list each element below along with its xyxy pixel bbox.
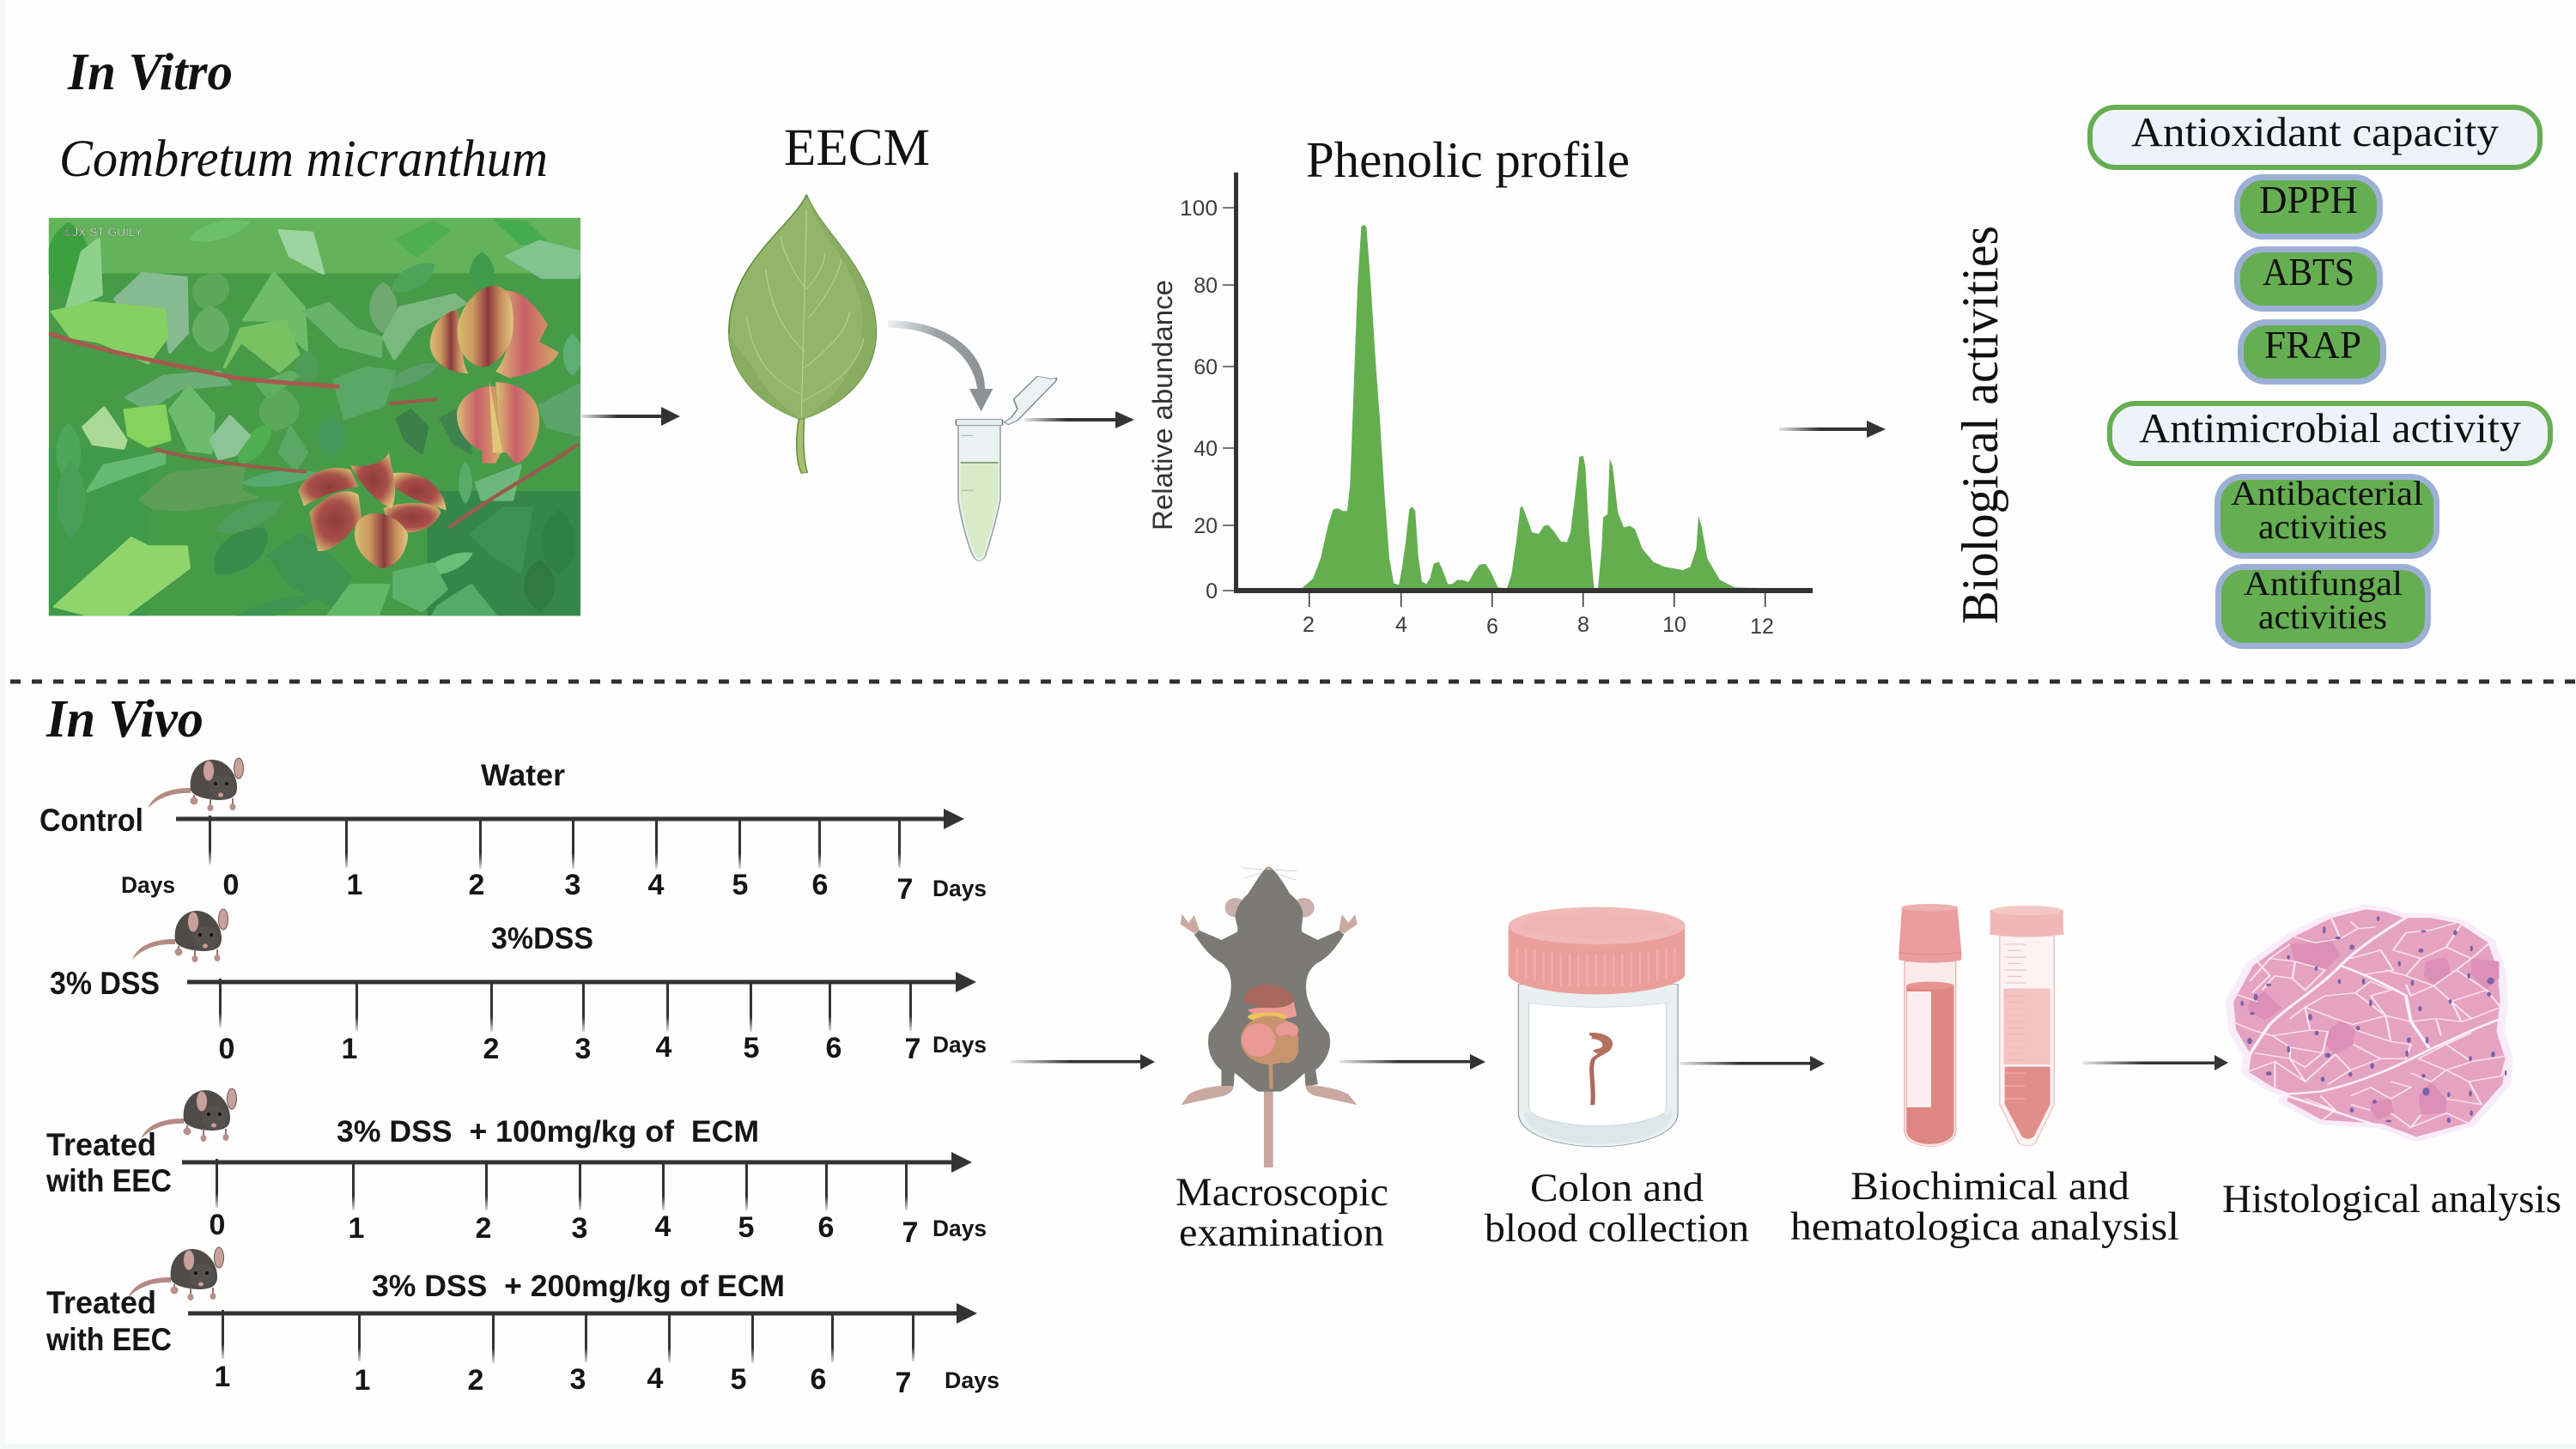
chart: phenolic profile area chart: [1147, 173, 1813, 639]
arrow: plant to leaf: [580, 407, 680, 426]
box: Antibacterial activities: [2217, 474, 2437, 556]
box: FRAP: FRAP: [2264, 323, 2361, 367]
day labels: 2: [468, 1364, 483, 1397]
label: Treated with EEC: Treated: [46, 1127, 156, 1162]
centrifuge tube: [1990, 906, 2064, 1146]
caption: Macroscopic examination: Macroscopic: [1176, 1170, 1388, 1215]
box: DPPH: DPPH: [2259, 178, 2358, 221]
box: DPPH: [2238, 177, 2380, 237]
label: Biological activities: Biological activities: [1952, 226, 2008, 624]
arrow: chart to activities: [1779, 421, 1886, 438]
caption: Biochimical and hematologica analysisl: [1790, 1164, 2179, 1249]
y tick labels: 20: [1194, 514, 1218, 538]
label: Treated with EEC second: with EEC: [46, 1322, 172, 1357]
day labels: 7: [902, 1216, 918, 1249]
y tick labels: 80: [1194, 274, 1218, 298]
heading: Combretum micranthum: Combretum micranthum: [59, 130, 548, 188]
x tick labels: [1303, 613, 1774, 639]
day labels: 2: [469, 869, 484, 901]
label: Treated with EEC second: [46, 1285, 172, 1357]
photo: Combretum micranthum plant: [47, 214, 581, 628]
y tick labels: 60: [1194, 355, 1218, 379]
label: 200 mg/kg dose: 3% DSS + 200mg/kg of ECM: [372, 1270, 785, 1303]
day labels: 6: [812, 869, 828, 901]
arrow: tubes to histology: [2083, 1055, 2228, 1070]
day labels: 1: [347, 869, 362, 901]
x tick labels: 6: [1486, 615, 1498, 639]
timeline: control group: [39, 758, 987, 906]
day labels: 1: [342, 1033, 357, 1065]
day labels: [215, 1361, 999, 1399]
heading: In Vitro: In Vitro: [67, 44, 233, 101]
day labels: 4: [647, 1362, 664, 1395]
label: 100 mg/kg dose: 3% DSS + 100mg/kg of ECM: [337, 1115, 759, 1149]
day labels: 5: [744, 1032, 759, 1064]
day labels: 0: [223, 869, 239, 901]
watermark text: ©JX ST GUILY: [64, 225, 143, 239]
day labels: [121, 869, 987, 906]
arrow: dissection to jar: [1340, 1054, 1485, 1070]
day labels: 6: [811, 1363, 826, 1396]
y tick labels: 40: [1194, 437, 1218, 461]
caption: Biochimical and hematologica analysisl: Biochimical and: [1850, 1164, 2129, 1209]
box: Antifungal activities: Antifungal: [2244, 564, 2403, 603]
heading: In Vivo: In Vivo: [46, 690, 204, 749]
timeline arrow: [176, 809, 964, 869]
day labels: 0: [219, 1033, 234, 1065]
caption: Histological analysis: Histological analysis: [2222, 1177, 2561, 1222]
box: Antioxidant capacity: [2090, 107, 2540, 167]
x tick labels: 4: [1395, 613, 1407, 637]
icon: mouse treated 100: [141, 1088, 237, 1142]
box: ABTS: [2238, 249, 2380, 309]
illustration: blood tubes: [1899, 904, 2064, 1146]
day labels: 4: [648, 869, 665, 901]
day labels: 7: [897, 873, 913, 906]
timeline: treated 200 mg/kg: [46, 1247, 999, 1399]
arrow: timelines to dissection: [1011, 1054, 1155, 1070]
day labels: 1: [215, 1361, 230, 1393]
timeline: 3% DSS group: [50, 909, 987, 1065]
icon: leaf: [729, 195, 876, 473]
arrow: tube to chart: [1024, 411, 1134, 428]
day labels: [210, 1209, 987, 1249]
day labels: 2: [483, 1033, 499, 1065]
label: Control: Control: [39, 803, 143, 838]
x tick labels: 12: [1750, 615, 1774, 639]
heading: EECM: EECM: [784, 119, 930, 177]
box: Antifungal activities: [2219, 564, 2428, 646]
panel: in vivo: [39, 690, 2561, 1399]
timeline arrow: [187, 972, 976, 1032]
day labels: 3: [565, 869, 580, 901]
day labels: 5: [738, 1211, 754, 1244]
day labels: 4: [655, 1210, 671, 1243]
timeline: treated 100 mg/kg: [46, 1088, 987, 1249]
day labels: [219, 1031, 987, 1065]
day labels: 1: [349, 1212, 364, 1245]
x tick labels: 10: [1662, 613, 1686, 637]
y tick labels: [1180, 197, 1218, 603]
x axis: [1234, 588, 1813, 607]
timeline arrow: [182, 1152, 972, 1210]
heading: Phenolic profile: Phenolic profile: [1306, 131, 1630, 188]
label: 3% DSS: 3% DSS: [50, 966, 160, 1001]
blood collection tube: [1899, 904, 1961, 1146]
arrow: curved leaf to tube: [888, 320, 993, 411]
day labels: 5: [731, 1363, 746, 1396]
area series: [1302, 225, 1808, 590]
caption: Colon and blood collection: blood collection: [1485, 1206, 1749, 1251]
caption: Macroscopic examination: examination: [1179, 1210, 1384, 1255]
y axis: [1223, 173, 1238, 593]
icon: mouse control: [148, 758, 244, 811]
icon: extract tube: [956, 376, 1056, 561]
box: Antioxidant capacity: Antioxidant capacity: [2131, 108, 2500, 155]
caption: Colon and blood collection: Colon and: [1530, 1166, 1704, 1210]
y tick labels: 100: [1180, 197, 1218, 221]
label: Water: Water: [481, 759, 565, 792]
box: Antibacterial activities: activities: [2258, 507, 2387, 546]
box: Antibacterial activities: Antibacterial: [2231, 474, 2423, 512]
day labels: 3: [575, 1033, 591, 1065]
illustration: histological section: [2229, 907, 2509, 1139]
day labels: 6: [826, 1032, 841, 1064]
day labels: Days: [121, 872, 175, 898]
box: ABTS: ABTS: [2263, 250, 2354, 294]
caption: Colon and blood collection: [1485, 1166, 1749, 1251]
timeline arrow: [188, 1303, 977, 1363]
y tick labels: 0: [1206, 579, 1218, 603]
day labels: 7: [896, 1367, 911, 1399]
arrow: jar to tubes: [1680, 1056, 1825, 1071]
x tick labels: 2: [1303, 613, 1315, 637]
icon: mouse DSS: [132, 909, 228, 962]
x tick labels: 8: [1577, 613, 1589, 637]
day labels: 3: [570, 1363, 586, 1396]
label: Treated with EEC: [46, 1127, 172, 1198]
day labels: 0: [210, 1209, 225, 1241]
day labels: 3: [572, 1212, 587, 1245]
y axis title: Relative abundance: [1147, 280, 1178, 530]
caption: Biochimical and hematologica analysisl: hematologica analysisl: [1790, 1204, 2179, 1249]
illustration: dissected mouse: [1180, 866, 1358, 1167]
day labels: Days: [933, 1032, 987, 1058]
day labels: Days: [933, 876, 987, 901]
day labels: 7: [905, 1033, 920, 1065]
label: 3%DSS: 3%DSS: [491, 922, 593, 955]
day labels: Days: [945, 1367, 999, 1393]
panel: in vitro: [47, 44, 2550, 646]
box: Antimicrobial activity: [2110, 403, 2550, 464]
illustration: specimen jar with colon: [1509, 907, 1686, 1147]
day labels: 2: [476, 1212, 491, 1245]
box: Antifungal activities: activities: [2258, 597, 2387, 636]
icon: mouse treated 200: [128, 1247, 223, 1300]
day labels: 6: [818, 1211, 834, 1244]
label: Treated with EEC: with EEC: [46, 1163, 172, 1198]
day labels: 1: [355, 1364, 370, 1397]
day labels: 4: [656, 1031, 672, 1064]
box: Antimicrobial activity: Antimicrobial activity: [2139, 404, 2522, 452]
day labels: 5: [732, 869, 748, 901]
label: Treated with EEC second: Treated: [46, 1285, 156, 1320]
day labels: Days: [933, 1216, 987, 1241]
box: FRAP: [2241, 323, 2384, 381]
caption: Macroscopic examination: [1176, 1170, 1388, 1255]
